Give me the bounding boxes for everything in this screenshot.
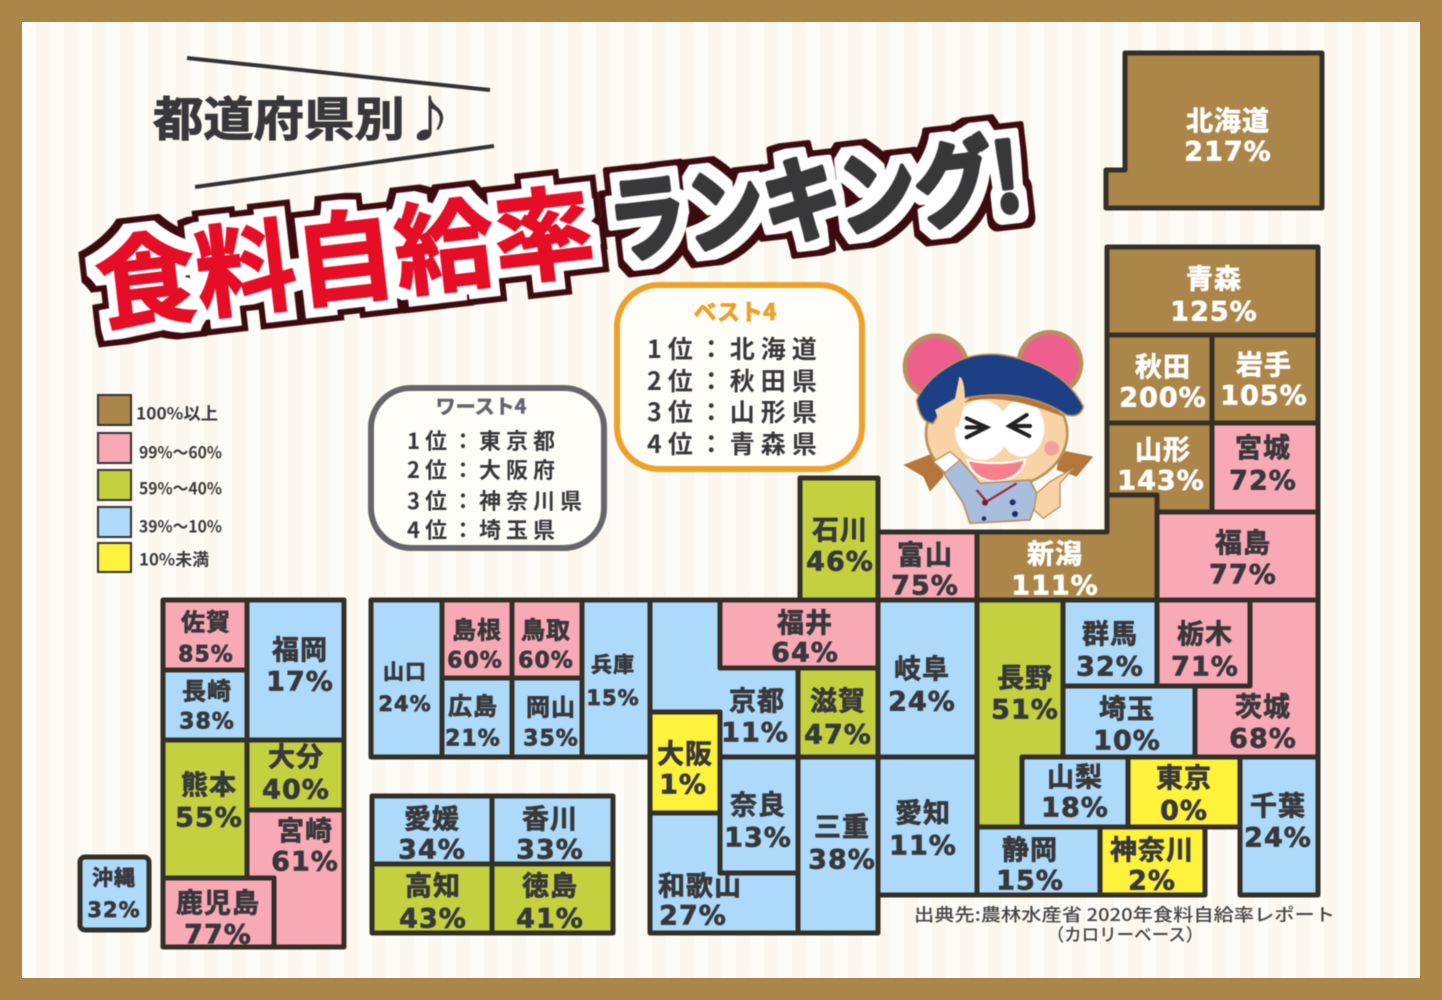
text: 35% xyxy=(523,726,579,752)
text: 111% xyxy=(1011,570,1099,602)
text: 奈良 xyxy=(730,784,786,822)
text: 山形 xyxy=(1135,428,1191,468)
text: 64% xyxy=(771,638,839,668)
text: 51% xyxy=(991,694,1059,726)
text: 茨城 xyxy=(1235,686,1291,724)
text: 高知 xyxy=(405,864,461,904)
source note: 出典先:農林水産省 2020年食料自給率レポート xyxy=(914,902,1335,927)
source note xyxy=(914,902,1335,947)
panel: worst 4: 2位：大阪府 xyxy=(407,453,560,485)
text: 大阪 xyxy=(657,732,713,772)
text: 33% xyxy=(516,834,584,866)
text: 77% xyxy=(184,920,252,950)
text: 10% xyxy=(1093,726,1161,756)
text: 15% xyxy=(996,866,1064,896)
text: 栃木 xyxy=(1177,612,1233,652)
map cells xyxy=(1106,53,1322,208)
text: 85% xyxy=(178,642,234,668)
text: 13% xyxy=(724,822,792,854)
panel: worst 4: ワースト4 xyxy=(436,390,527,420)
text: 宮崎 xyxy=(277,810,333,848)
panel: worst 4: 3位：神奈川県 xyxy=(407,484,587,516)
text: 兵庫 xyxy=(591,649,635,679)
subtitle: 都道府県別 with lines xyxy=(153,58,494,187)
map cells: 217% xyxy=(1184,136,1272,168)
subtitle: 都道府県別 with lines: 都道府県別♪ xyxy=(153,81,455,150)
text: 沖縄 xyxy=(92,862,136,892)
text: 岐阜 xyxy=(894,648,950,686)
legend: 10%未満 xyxy=(139,546,209,570)
text: 71% xyxy=(1171,652,1239,682)
text: 岡山 xyxy=(526,688,576,722)
text: 41% xyxy=(516,904,584,934)
panel: best 4: 1位：北海道 xyxy=(647,330,823,366)
text: 34% xyxy=(398,834,466,866)
legend: 99%～60% xyxy=(139,438,222,464)
text: 200% xyxy=(1119,382,1207,414)
text: 72% xyxy=(1229,466,1297,496)
text: 山梨 xyxy=(1047,756,1103,794)
mascot xyxy=(903,330,1093,523)
map cells: 北海道 xyxy=(1186,100,1270,138)
text: 香川 xyxy=(522,798,578,836)
text: 千葉 xyxy=(1250,784,1306,824)
source note: （カロリーベース） xyxy=(1047,922,1203,947)
text: 青森 xyxy=(1186,258,1242,296)
text: 47% xyxy=(804,720,872,750)
panel: best 4 xyxy=(617,285,862,469)
text: 愛知 xyxy=(895,792,951,830)
text: 68% xyxy=(1229,724,1297,754)
text: 75% xyxy=(891,570,959,602)
text: 福井 xyxy=(777,602,833,640)
text: 三重 xyxy=(814,806,870,844)
text: 1% xyxy=(659,770,707,800)
text: 18% xyxy=(1041,792,1109,824)
text: 15% xyxy=(586,686,640,710)
text: 61% xyxy=(271,846,339,878)
text: 京都 xyxy=(729,680,785,718)
text: 17% xyxy=(266,666,334,698)
text: 神奈川 xyxy=(1110,828,1194,868)
text: 鳥取 xyxy=(521,610,571,646)
text: 38% xyxy=(179,710,235,734)
text: 60% xyxy=(447,648,503,674)
text: 新潟 xyxy=(1027,532,1083,572)
text: 11% xyxy=(721,718,789,748)
title: 食料自給率ランキング xyxy=(88,102,1029,351)
text: 40% xyxy=(262,774,330,806)
text: 43% xyxy=(399,904,467,934)
text: 46% xyxy=(806,546,874,578)
text: 和歌山 xyxy=(658,864,742,904)
text: 佐賀 xyxy=(181,602,231,638)
text: 群馬 xyxy=(1082,612,1138,652)
text: 長野 xyxy=(997,656,1053,696)
text: 0% xyxy=(1160,796,1208,826)
text: 55% xyxy=(175,802,243,834)
text: 21% xyxy=(445,726,501,752)
text: 77% xyxy=(1209,560,1277,590)
text: 125% xyxy=(1170,296,1258,328)
panel: best 4: 3位：山形県 xyxy=(647,393,823,429)
legend xyxy=(98,395,222,572)
text: 岩手 xyxy=(1236,344,1292,382)
text: 105% xyxy=(1220,380,1308,412)
text: 60% xyxy=(518,648,574,674)
panel: best 4: 4位：青森県 xyxy=(647,425,823,461)
panel: worst 4: 4位：埼玉県 xyxy=(407,513,560,545)
text: 山口 xyxy=(383,656,427,686)
text: 32% xyxy=(1076,652,1144,682)
title: 食料自給率ランキング: ランキング! xyxy=(600,102,1028,283)
text: 広島 xyxy=(448,686,498,722)
text: 27% xyxy=(659,900,727,932)
text: 熊本 xyxy=(181,764,237,802)
text: 宮城 xyxy=(1235,426,1291,466)
legend: 100%以上 xyxy=(136,400,218,424)
text: 24% xyxy=(378,692,432,716)
text: 24% xyxy=(888,686,956,718)
title: 食料自給率ランキング: 食料自給率 xyxy=(88,151,601,351)
text: 福岡 xyxy=(272,628,328,668)
text: 38% xyxy=(808,844,876,876)
text: 鹿児島 xyxy=(176,882,260,920)
text: 福島 xyxy=(1215,522,1271,560)
text: 富山 xyxy=(897,534,953,572)
panel: best 4: 2位：秋田県 xyxy=(647,362,823,398)
text: 秋田 xyxy=(1135,346,1191,384)
text: 2% xyxy=(1128,866,1176,896)
text: 島根 xyxy=(452,610,502,646)
text: 石川 xyxy=(812,508,868,548)
text: 静岡 xyxy=(1002,828,1058,868)
text: 滋賀 xyxy=(810,680,866,718)
text: 徳島 xyxy=(522,864,578,904)
panel: worst 4 xyxy=(371,388,604,548)
text: 長崎 xyxy=(182,672,232,706)
text: 大分 xyxy=(268,736,324,774)
panel: best 4: ベスト4 xyxy=(693,293,777,327)
text: 143% xyxy=(1117,466,1205,496)
text: 東京 xyxy=(1156,756,1212,796)
legend: 39%～10% xyxy=(139,512,222,538)
text: 11% xyxy=(889,830,957,862)
text: 愛媛 xyxy=(404,798,460,836)
text: 24% xyxy=(1244,822,1312,854)
text: 32% xyxy=(87,898,141,922)
legend: 59%～40% xyxy=(139,474,222,500)
text: 埼玉 xyxy=(1099,688,1155,726)
panel: worst 4: 1位：東京都 xyxy=(407,424,560,456)
